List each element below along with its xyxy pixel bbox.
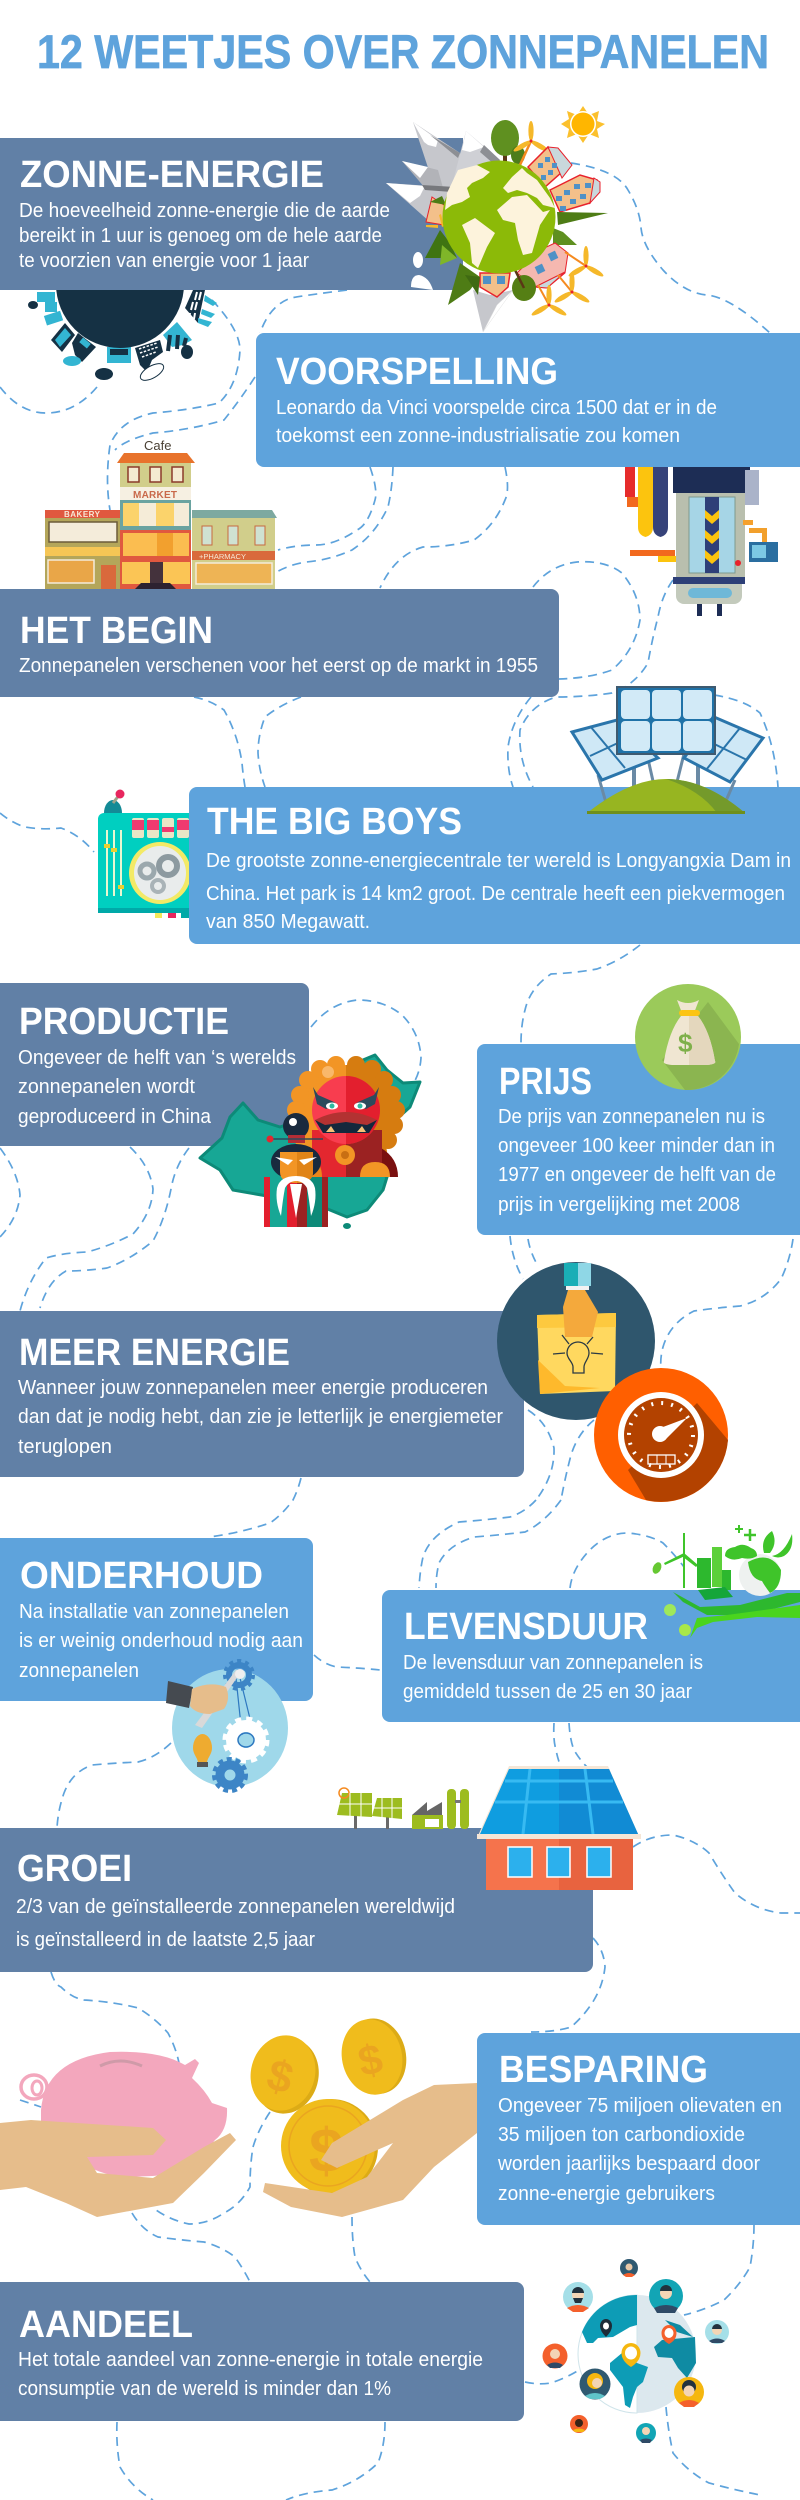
panel: onderhoud: Na installatie van zonnepanelen xyxy=(19,1601,289,1623)
panel: the big boys: van 850 Megawatt. xyxy=(206,911,370,933)
small solar panels and factory xyxy=(337,1788,469,1829)
illustration: coins and hand xyxy=(242,2013,477,2217)
panel: aandeel: consumptie van de wereld is minder dan 1% xyxy=(18,2378,391,2400)
panel: prijs: 1977 en ongeveer de helft van de xyxy=(498,1164,776,1186)
panel: the big boys: De grootste zonne-energiecentrale ter wereld is Longyangxia Dam in xyxy=(206,850,791,872)
Cafe building: MARKET xyxy=(133,490,177,501)
panel: aandeel xyxy=(0,2282,524,2421)
Cafe building: Cafe xyxy=(144,438,171,453)
panel: zonne-energie: bereikt in 1 uur is genoeg om de hele aarde xyxy=(19,225,382,247)
panel: levensduur: gemiddeld tussen de 25 en 30 jaar xyxy=(403,1681,692,1703)
illustration: hand with light-bulb note xyxy=(497,1262,655,1420)
illustration: teal radio with gears xyxy=(98,790,198,918)
panel: groei: 2/3 van de geïnstalleerde zonnepanelen wereldwijd xyxy=(16,1896,455,1918)
panel: the big boys: THE BIG BOYS xyxy=(207,801,462,843)
icon: money bag xyxy=(635,984,741,1090)
panel: zonne-energie xyxy=(0,138,463,290)
blue gear xyxy=(214,1759,246,1791)
panel: onderhoud: is er weinig onderhoud nodig aan xyxy=(19,1630,303,1652)
illustration: coins and hand: $ xyxy=(354,2035,387,2085)
panel: meer energie: teruglopen xyxy=(18,1436,112,1458)
Cafe building xyxy=(117,438,195,589)
white gear xyxy=(225,1719,267,1761)
panel: productie: geproduceerd in China xyxy=(18,1106,212,1128)
panel: onderhoud: zonnepanelen xyxy=(19,1660,139,1682)
panel: meer energie: MEER ENERGIE xyxy=(19,1332,290,1374)
illustration: world globe with people xyxy=(542,2259,729,2443)
panel: levensduur: De levensduur van zonnepanelen is xyxy=(403,1652,703,1674)
illustration: green city and globe xyxy=(651,1525,800,1638)
panel: voorspelling: Leonardo da Vinci voorspelde circa 1500 dat er in de xyxy=(276,397,717,419)
panel: levensduur xyxy=(382,1590,800,1722)
panel: besparing: BESPARING xyxy=(499,2049,708,2091)
Pharmacy building xyxy=(192,510,277,590)
panel: prijs: prijs in vergelijking met 2008 xyxy=(498,1194,740,1216)
panel: meer energie: dan dat je nodig hebt, dan zie je letterlijk je energiemeter xyxy=(18,1406,503,1428)
icon: energy meter gauge xyxy=(594,1368,728,1502)
panel: voorspelling xyxy=(256,333,800,467)
panel: zonne-energie: te voorzien van energie voor 1 jaar xyxy=(19,250,309,272)
panel: besparing: zonne-energie gebruikers xyxy=(498,2183,715,2205)
panel: voorspelling: toekomst een zonne-industrialisatie zou komen xyxy=(276,425,680,447)
panel: prijs: PRIJS xyxy=(499,1061,592,1103)
panel: besparing: worden jaarlijks bespaard door xyxy=(497,2153,760,2175)
Bakery building xyxy=(45,510,120,590)
panel: voorspelling: VOORSPELLING xyxy=(276,351,558,393)
panel: levensduur: LEVENSDUUR xyxy=(404,1606,648,1648)
sun xyxy=(561,106,605,143)
illustration: shop buildings xyxy=(45,438,277,590)
panel: het begin xyxy=(0,589,559,697)
map pins xyxy=(600,2319,676,2367)
illustration: dark planet with factories xyxy=(28,220,217,384)
illustration: coins and hand: $ xyxy=(309,2117,343,2186)
panel: groei xyxy=(0,1828,593,1972)
panel: prijs: ongeveer 100 keer minder dan in xyxy=(498,1135,775,1157)
panel: the big boys xyxy=(189,787,800,944)
panel: prijs: De prijs van zonnepanelen nu is xyxy=(498,1106,765,1128)
panel: productie xyxy=(0,983,309,1146)
panel: het begin: Zonnepanelen verschenen voor het eerst op de markt in 1955 xyxy=(19,655,538,677)
panel: productie: PRODUCTIE xyxy=(19,1001,229,1043)
icon: money bag: $ xyxy=(678,1028,693,1058)
panel: productie: Ongeveer de helft van ‘s werelds xyxy=(18,1047,296,1069)
panel: groei: is geïnstalleerd in de laatste 2,5 jaar xyxy=(16,1929,315,1951)
Bakery building: BAKERY xyxy=(64,510,101,519)
panel: productie: zonnepanelen wordt xyxy=(18,1076,195,1098)
illustration: coins and hand: $ xyxy=(262,2050,298,2104)
panel: besparing: Ongeveer 75 miljoen olievaten en xyxy=(498,2095,782,2117)
panel: groei: GROEI xyxy=(17,1848,132,1890)
illustration: solar panels on green hill xyxy=(572,687,763,814)
panel: prijs xyxy=(477,1044,800,1235)
globe sphere xyxy=(442,160,556,274)
panel: besparing xyxy=(477,2033,800,2225)
panel: aandeel: Het totale aandeel van zonne-energie in totale energie xyxy=(18,2349,483,2371)
panel: zonne-energie: ZONNE-ENERGIE xyxy=(20,154,324,196)
panel: meer energie xyxy=(0,1311,524,1477)
illustration: China map, lion and emperor xyxy=(200,1055,420,1229)
panel: besparing: 35 miljoen ton carbondioxide xyxy=(498,2124,745,2146)
avatars xyxy=(542,2259,729,2443)
panel: het begin: HET BEGIN xyxy=(20,610,213,652)
illustration: hand with wrench and gears xyxy=(166,1661,288,1791)
lion xyxy=(287,1056,405,1177)
panel: meer energie: Wanneer jouw zonnepanelen meer energie produceren xyxy=(18,1377,488,1399)
illustration: green globe with mountains, buildings and turbines xyxy=(386,106,608,332)
panel: aandeel: AANDEEL xyxy=(19,2304,193,2346)
illustration: house with solar roof and small factory xyxy=(337,1766,641,1890)
illustration: machine xyxy=(625,467,778,616)
panel: onderhoud xyxy=(0,1538,313,1701)
illustration: hand holding piggy bank xyxy=(0,2052,236,2217)
panel: onderhoud: ONDERHOUD xyxy=(20,1555,263,1597)
panel: zonne-energie: De hoeveelheid zonne-energie die de aarde xyxy=(19,200,390,222)
Pharmacy building: +PHARMACY xyxy=(199,552,246,561)
emperor xyxy=(264,1113,328,1227)
